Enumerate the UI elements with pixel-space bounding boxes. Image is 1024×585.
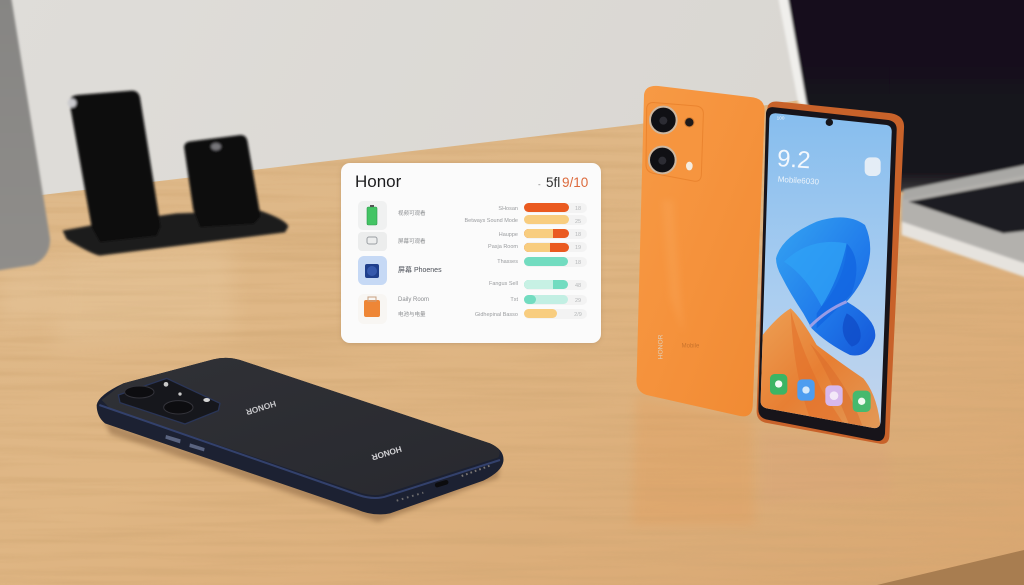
feature icon: bag (358, 294, 387, 324)
feature icon: battery (358, 201, 387, 230)
dark phone brand marks: HONOR (245, 399, 277, 417)
clock text: 9.2 (776, 145, 811, 174)
status text: 100 (777, 115, 785, 120)
laptop hinge strip (903, 163, 1024, 200)
right laptop (777, 0, 1024, 280)
orange phone gloss (662, 200, 683, 333)
feature icon: camera (358, 256, 387, 285)
panel score: 9/10 (562, 175, 588, 190)
bar values: 18 (575, 232, 581, 238)
laptop keyboard (908, 178, 1024, 233)
bar values: 19 (575, 245, 581, 251)
bar labels right: Hauppe (499, 232, 518, 238)
panel score: - (538, 180, 541, 189)
phone on stand: small (184, 135, 261, 227)
bar values: 29 (575, 298, 581, 304)
feature names left: Daily Room (398, 297, 429, 303)
wallpaper blue flower (776, 217, 875, 355)
bar labels right (464, 206, 518, 318)
dark phone camera island (118, 378, 220, 424)
bar values: 2/9 (574, 312, 582, 318)
bar labels right: Betways Sound Mode (464, 218, 518, 224)
dark phone buttons (165, 435, 205, 451)
orange phone engraved marks (657, 334, 700, 359)
stand highlights (68, 99, 221, 150)
feature icon: display (358, 232, 387, 251)
dark phone brand marks: HONOR (370, 444, 403, 463)
bar labels right: Thasses (497, 259, 518, 265)
stand base (63, 211, 288, 256)
bar values: 25 (575, 219, 581, 225)
date text: Mobile6030 (778, 175, 820, 187)
phone bezel (758, 107, 897, 441)
front camera (826, 119, 833, 126)
panel score: 5fl (546, 175, 560, 190)
feature names left: 屏幕可观看 (398, 237, 426, 245)
feature names left (398, 209, 442, 318)
dark phone back glass (102, 358, 500, 495)
dark phone body (97, 358, 503, 514)
laptop front edge (902, 222, 1024, 280)
bar tracks (524, 203, 587, 319)
phone on stand: tall (69, 91, 161, 242)
phone frame (757, 102, 904, 444)
laptop deck (902, 167, 1024, 277)
dark Honor phone lying flat (97, 358, 503, 514)
bar values (574, 206, 582, 318)
score panel (341, 163, 601, 343)
bar labels right: Txt (510, 297, 518, 303)
phone screen (757, 110, 897, 433)
bar labels right: Fangus Sell (489, 281, 518, 287)
bar values: 48 (575, 283, 581, 289)
desk front edge (877, 550, 1024, 585)
feature names left: 视频可观看 (398, 209, 426, 217)
wireless charging stand with two phones (63, 91, 288, 256)
feature names left: 电池与电量 (398, 310, 426, 318)
bar labels right: SHosan (498, 206, 518, 212)
panel title: Honor (355, 172, 402, 191)
orange phone body (636, 86, 765, 416)
bar values: 18 (575, 260, 581, 266)
left laptop edge (0, 0, 50, 272)
panel score (538, 175, 588, 190)
app icons (770, 374, 871, 412)
laptop bezel strip (777, 0, 808, 107)
feature names left: 屏幕 Phoenes (398, 265, 442, 274)
orange phone: back view (636, 86, 765, 416)
widget button (865, 157, 881, 176)
dark phone shadow (105, 422, 500, 522)
dark phone side band (99, 405, 500, 498)
front-facing phone (757, 102, 904, 444)
dark phone charging port and speakers (397, 465, 492, 501)
score bars (524, 203, 569, 318)
orange phone engraved marks: HONOR (657, 334, 664, 359)
bar labels right: Pasja Room (488, 244, 518, 250)
wallpaper orange wave (760, 308, 881, 430)
desk reflections (0, 245, 890, 525)
bar values: 18 (575, 206, 581, 212)
camera island (646, 103, 703, 181)
dark phone brand marks (245, 399, 403, 463)
laptop screen (787, 0, 1024, 192)
orange phone engraved marks: Mobile (682, 344, 700, 350)
bar labels right: Gidhepinal Basso (475, 312, 518, 318)
